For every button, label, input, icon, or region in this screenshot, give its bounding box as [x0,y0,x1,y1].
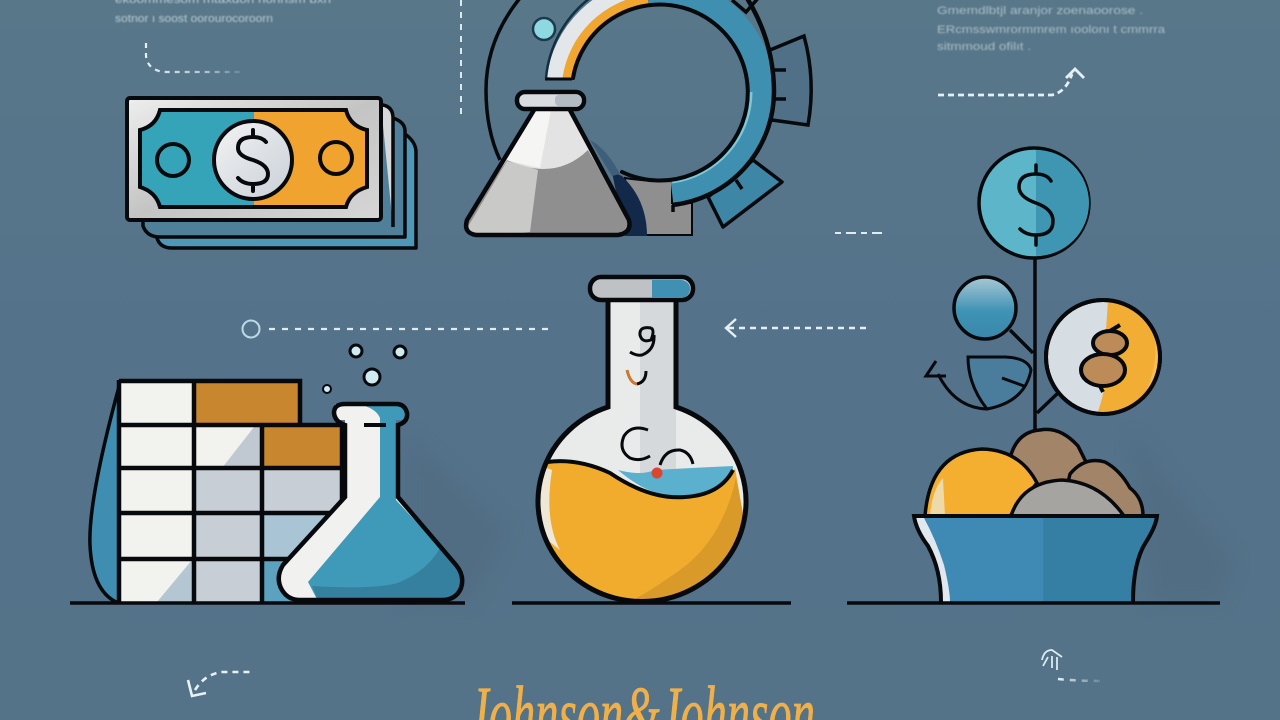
conical flask [460,92,640,240]
ring: outlines [573,5,748,181]
icon: bottom right small marker with dashes [1042,650,1105,681]
right coin [1046,300,1165,414]
flask symbols [622,328,693,465]
stem and branches [1010,259,1058,450]
icon: data table with flask [90,345,470,605]
flask outline [538,300,746,602]
leaf with arrow [926,357,1031,409]
gauge tabs [708,0,811,227]
rocks [925,429,1143,516]
text block: top left caption: sotnor ı soost oorourocoroorn [115,13,273,25]
ring: white and orange segment [555,0,648,78]
icon: round-bottom flask with orange liquid [535,274,749,602]
arrow: bottom left dashed arrow [188,672,252,696]
text block: top left caption [115,0,331,25]
arrow: short dashes [835,232,884,234]
grey base block [625,178,692,235]
icon: flask with ring gauge [460,0,811,240]
arrow: top left dashed curve [146,43,245,72]
arrow: dashed arrow pointing to flask [726,319,869,337]
table backing [90,383,122,602]
arrow: left dashed line with circle [242,320,550,338]
arrow: top right dashed arrow [938,69,1084,95]
icon: money plant in bowl [914,148,1165,606]
table cells [121,383,342,603]
text block: top right caption: Gmemdlbtjl aranjor zoenaoorose . [937,5,1143,17]
flask with blue liquid [279,404,470,605]
small blue ball [954,277,1016,339]
text block: top right caption: sitmmoud ofilıt . [937,41,1031,53]
arrow: vertical dotted line [460,0,462,116]
ring: blue segment [648,0,761,192]
bubbles [323,345,406,393]
ground lines [70,601,1220,605]
bowl [914,516,1163,606]
top dollar coin [979,148,1089,258]
dollar coin [214,121,292,199]
liquid surface line [547,461,733,497]
text block: top right caption [937,5,1166,53]
text block: top right caption: ERcmsswmrormmrem ıoolonı t cmmrra [937,24,1166,36]
icon: stack of banknotes [127,98,416,248]
table grid [119,380,342,603]
banknote centre panel [140,110,367,207]
